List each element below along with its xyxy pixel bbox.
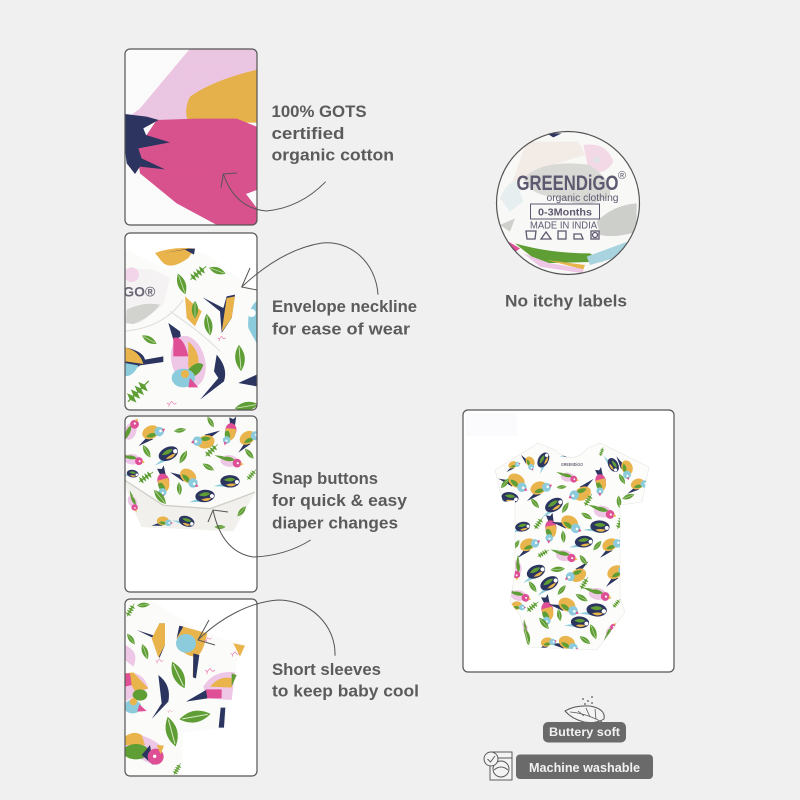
icon: feather (565, 696, 604, 723)
text: diaper changes: diaper changes (272, 514, 398, 532)
registered mark: ® (618, 170, 626, 182)
arrow: sleeves (198, 600, 335, 656)
bodysuit (495, 443, 650, 654)
badge: buttery soft (543, 722, 626, 742)
text: short sleeves: Short sleeves (272, 661, 381, 679)
tagline: organic clothing (546, 193, 618, 204)
size box: 0-3Months (538, 208, 592, 218)
text: keep baby cool: to keep baby cool (272, 683, 419, 701)
text: organic cotton: 100% GOTS (272, 103, 366, 121)
panel: envelope neckline close-up (119, 233, 260, 413)
badge: machine washable: Machine washable (529, 761, 640, 775)
panel: snap buttons close-up (124, 415, 258, 593)
arrow: cotton (221, 173, 326, 211)
care icons (526, 231, 599, 239)
icon: washing machine (484, 752, 512, 780)
brand name: GREENDiGO (516, 172, 618, 195)
made in india: MADE IN INDIA (530, 220, 597, 232)
panel: fabric close-up (123, 47, 260, 227)
arrow: neckline (242, 243, 378, 295)
panel: short sleeves close-up (123, 598, 257, 777)
text: certified: certified (272, 125, 344, 143)
neck label: GREENDiGO (561, 462, 583, 467)
badge: buttery soft: Buttery soft (549, 725, 620, 739)
panel: full bodysuit product (463, 410, 674, 672)
size box (530, 204, 600, 219)
text: envelope neckline: Envelope neckline (272, 298, 417, 316)
text: no itchy labels: No itchy labels (505, 293, 627, 311)
small brand mark on collar: IGO® (119, 283, 156, 299)
text: ease of wear: for ease of wear (272, 320, 411, 338)
callout: label close-up circle (496, 132, 640, 274)
badge: machine washable (516, 754, 653, 779)
text: organic cotton line: organic cotton (272, 147, 394, 165)
text: quick and easy: for quick & easy (272, 492, 408, 510)
arrow: snap buttons (208, 510, 311, 557)
text: snap buttons: Snap buttons (272, 470, 378, 488)
